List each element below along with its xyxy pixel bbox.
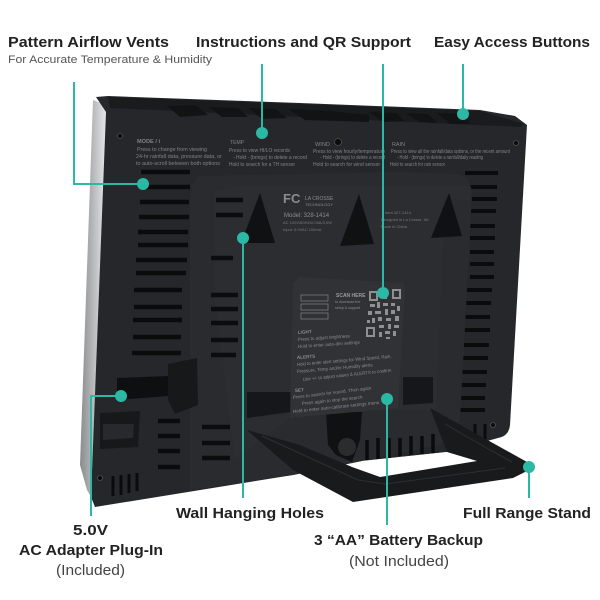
button labels printed text: RAIN xyxy=(392,142,405,148)
battery cover text: Pressure, Temp and/or Humidity alerts xyxy=(297,362,373,374)
model label text: Item 327-1414 xyxy=(385,210,412,215)
battery cover text: setup & support xyxy=(335,306,360,310)
button labels printed text: Press to view all the rainfall/data options, or the recent amount xyxy=(391,149,511,155)
callout: battery xyxy=(381,393,393,525)
button labels printed text: - Hold - (brings) to delete a record xyxy=(320,155,385,161)
button labels printed text: WIND xyxy=(315,142,330,148)
callout: buttons xyxy=(457,64,469,120)
button labels printed text: Press to view hourly/temperature xyxy=(313,149,385,155)
heading: full range stand: Full Range Stand xyxy=(463,505,591,522)
heading: pattern airflow vents: Pattern Airflow Vents xyxy=(8,34,169,51)
battery cover text: SET xyxy=(295,387,304,393)
battery cover text: Hold to enter alert settings for Wind Speed, Rain, xyxy=(297,354,392,367)
heading: wall hanging: Wall Hanging Holes xyxy=(176,505,324,522)
battery cover text: Press to adjust brightness xyxy=(298,333,351,342)
center panel inner recess xyxy=(215,186,470,460)
callout lines and dots xyxy=(74,64,535,525)
battery cover panel xyxy=(290,277,405,418)
device back body xyxy=(91,96,527,507)
battery cover text: SCAN HERE xyxy=(336,293,366,299)
button labels printed text: Press to change from viewing xyxy=(137,147,207,153)
ventilation slots right xyxy=(459,173,498,410)
button labels printed text: - Hold - (brings) to delete a rainfall/daily reading xyxy=(397,155,483,161)
ventilation slots left xyxy=(132,172,190,467)
stand ridges xyxy=(262,424,512,484)
heading: easy access: Easy Access Buttons xyxy=(434,34,590,51)
cutout background xyxy=(352,452,477,477)
heading: 5.0V adapter: (Included) xyxy=(56,563,125,579)
battery cover text: Press again to stop the search xyxy=(302,395,363,406)
model label text: TECHNOLOGY xyxy=(305,202,333,207)
battery cover text: LIGHT xyxy=(298,329,312,335)
wall hanging keyhole right xyxy=(431,193,462,238)
button labels printed text: Hold to search for wind sensor xyxy=(313,162,380,168)
button labels printed text: TEMP xyxy=(230,140,245,146)
heading: battery backup: 3 “AA” Battery Backup xyxy=(314,532,483,549)
button labels printed text: Hold to search for rain sensor xyxy=(390,162,445,168)
heading: 5.0V adapter xyxy=(19,522,163,579)
top buttons xyxy=(167,105,470,124)
button labels printed text: 24-hr rainfall data, pressure data, or xyxy=(136,154,222,160)
hinge foot xyxy=(326,412,362,462)
hinge ball xyxy=(338,438,356,456)
callout: stand xyxy=(523,461,535,498)
QR code xyxy=(366,289,401,339)
model label text: AC 120V/60HZ/0.05A/3.5W xyxy=(283,220,332,225)
battery cover text: Hold to enter auto-dim settings xyxy=(298,340,361,349)
battery cover text: to download the xyxy=(335,300,360,304)
battery cover text: Hold to enter auto-calibrate settings menu xyxy=(293,400,380,414)
wall hanging keyhole left xyxy=(241,193,275,243)
battery cover text xyxy=(293,293,392,414)
heading: 5.0V adapter: 5.0V xyxy=(73,522,108,539)
button labels printed text: to auto-scroll between both options xyxy=(136,161,221,167)
battery cover text: ALERTS xyxy=(297,354,315,360)
top ridge xyxy=(108,97,525,127)
callout: wall holes xyxy=(237,232,249,498)
silver front bezel xyxy=(80,100,107,497)
model label text: LA CROSSE xyxy=(305,196,334,202)
battery cover text: Press to search for sound. Then again xyxy=(293,385,372,400)
stand hinge bars xyxy=(247,392,291,418)
heading: 5.0V adapter: AC Adapter Plug-In xyxy=(19,542,163,559)
button labels printed text: MODE / i xyxy=(137,139,161,145)
callout: airflow vents xyxy=(74,82,149,190)
button labels printed text: Hold to search for a TH sensor xyxy=(229,162,295,168)
product: weather station back view xyxy=(80,96,533,507)
callout: QR support xyxy=(377,64,389,299)
wall hanging keyhole middle xyxy=(340,194,374,246)
battery diagram xyxy=(301,295,328,319)
callout: instructions xyxy=(256,64,268,139)
model label text: Designed in La Crosse, WI xyxy=(381,217,429,222)
heading: battery backup: (Not Included) xyxy=(349,554,449,570)
adapter recess xyxy=(117,376,168,400)
button labels printed text: - Hold - (brings) to delete a record xyxy=(233,155,307,161)
cord clip xyxy=(168,358,198,414)
raised center panel xyxy=(190,172,472,490)
bottom slots between stand arms xyxy=(367,434,433,460)
heading: battery backup xyxy=(314,532,483,570)
screws xyxy=(98,134,518,480)
adapter port xyxy=(100,411,140,449)
model label text xyxy=(283,191,429,232)
model label text: Model: 328-1414 xyxy=(284,213,330,219)
button labels printed text xyxy=(136,139,511,168)
battery cover text: Use +/- to adjust values & ALERTS to confirm xyxy=(303,368,392,382)
model label text: Made in China xyxy=(381,224,408,229)
button labels printed text: Press to view HI/LO records xyxy=(229,148,290,154)
panel slots xyxy=(202,200,243,458)
full range stand xyxy=(247,408,533,502)
model label text: FC xyxy=(283,191,301,206)
callout: adapter xyxy=(91,390,127,516)
subheading: accurate temperature: For Accurate Temperature & Humidity xyxy=(8,54,213,66)
heading: instructions: Instructions and QR Support xyxy=(196,34,411,51)
bottom edge slots xyxy=(113,424,485,496)
model label text: Input: 5.0VAC 100mA xyxy=(283,227,322,232)
